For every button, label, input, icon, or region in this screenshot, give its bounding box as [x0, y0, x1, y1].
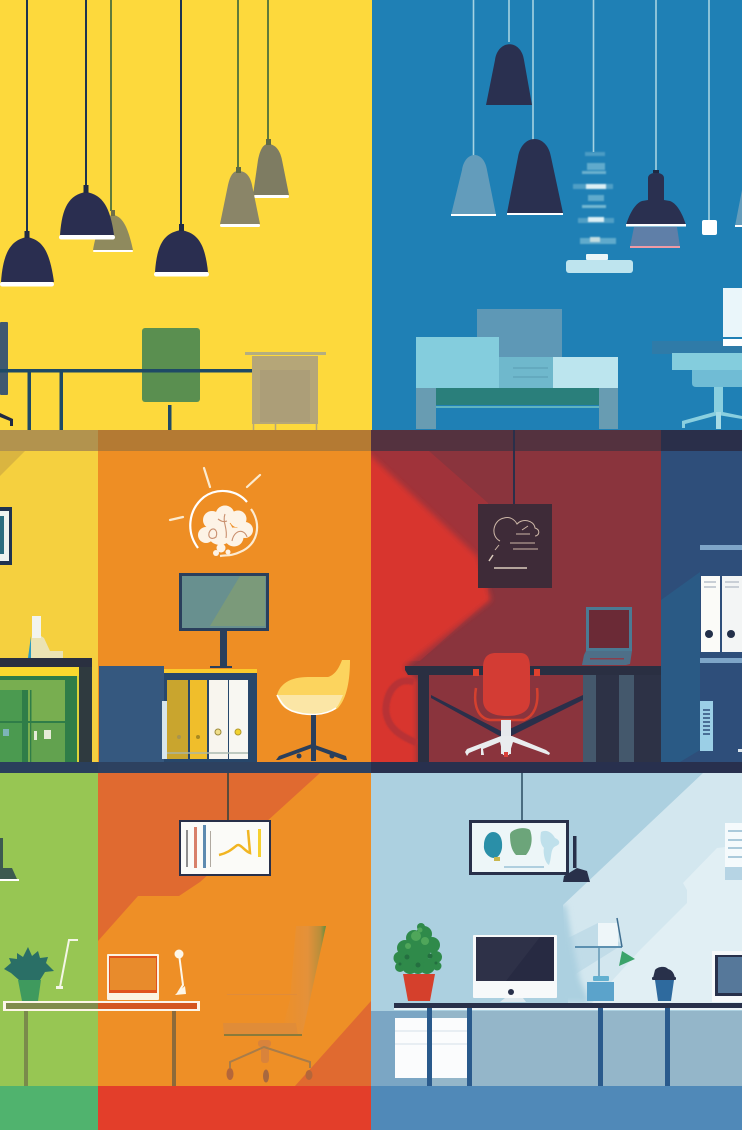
panel: yellow storage room	[0, 451, 98, 762]
dark lamp 1	[1, 237, 54, 282]
pendant lamps, blue room	[451, 0, 742, 273]
small dark lamp by picture	[563, 836, 590, 882]
upper floor beam	[0, 430, 742, 451]
faded lounge chair	[223, 926, 326, 1082]
binders	[167, 680, 248, 759]
green chair	[142, 328, 200, 402]
shelves and binders	[700, 545, 742, 752]
tan lamp behind	[93, 215, 133, 250]
monitor on stand	[179, 573, 269, 668]
floor strip: green, red, blue	[0, 1086, 742, 1130]
green cabinet	[0, 658, 92, 762]
desktop computer	[473, 935, 557, 1002]
dissolving stacked lamp	[566, 152, 633, 273]
storage cabinet with binders	[99, 666, 257, 762]
icon: brain in lightbulb	[170, 468, 260, 556]
panel: red room	[371, 430, 661, 762]
side table	[245, 352, 326, 355]
lower floor beam	[0, 762, 742, 773]
pendant lamps, yellow room	[0, 0, 289, 286]
teal desk with boxes	[416, 309, 618, 429]
small white bulb	[702, 220, 717, 235]
vase on cabinet	[28, 616, 63, 658]
hanging chart	[179, 773, 271, 876]
icon: potted plant	[394, 923, 442, 1001]
panel: blue room with pendant lamps	[372, 0, 742, 430]
hanging botanical picture	[469, 773, 569, 875]
laptop on desk	[582, 607, 632, 665]
table with white outline	[3, 1001, 200, 1086]
small dark lamp	[486, 44, 532, 105]
hanging chalkboard	[478, 430, 552, 588]
panel: light blue room	[371, 773, 742, 1086]
desk and chair, yellow room	[0, 322, 326, 430]
partial hanging lamp	[0, 838, 19, 881]
dark lamp 2	[60, 192, 114, 235]
right desk, chair and monitor	[652, 288, 742, 429]
coffee cup	[652, 967, 676, 1001]
tan lamp right	[253, 144, 289, 195]
yellow swivel chair	[276, 660, 350, 761]
wall frame	[0, 507, 12, 565]
red office chair	[465, 653, 550, 757]
panel: navy room with shelves	[661, 451, 742, 762]
brain	[198, 506, 253, 556]
dark lamp 3	[155, 230, 208, 272]
large dark lamp	[507, 139, 563, 213]
laptop, white outline	[107, 954, 159, 1000]
panel: orange room with brain icon	[98, 451, 371, 762]
tan lamp centre	[220, 171, 260, 224]
partial monitor at edge	[712, 951, 742, 1002]
small white lamp	[174, 950, 186, 995]
long desk with legs and drawers	[394, 1003, 742, 1086]
panel: yellow room with pendant lamps	[0, 0, 372, 430]
icon: potted fern	[4, 947, 54, 1001]
panel: orange room with chart	[3, 773, 371, 1086]
desk lamp with green shade	[575, 918, 635, 1001]
partial lamp at edge	[735, 190, 742, 226]
lamp reflection	[630, 227, 680, 247]
panel: green room	[0, 773, 98, 1086]
desk	[405, 666, 661, 762]
thin desk lamp	[60, 940, 78, 987]
dark neck lamp	[626, 173, 686, 225]
pale lamp	[451, 155, 496, 215]
wall notes	[725, 823, 742, 880]
cords	[474, 0, 709, 220]
cords	[27, 0, 268, 232]
